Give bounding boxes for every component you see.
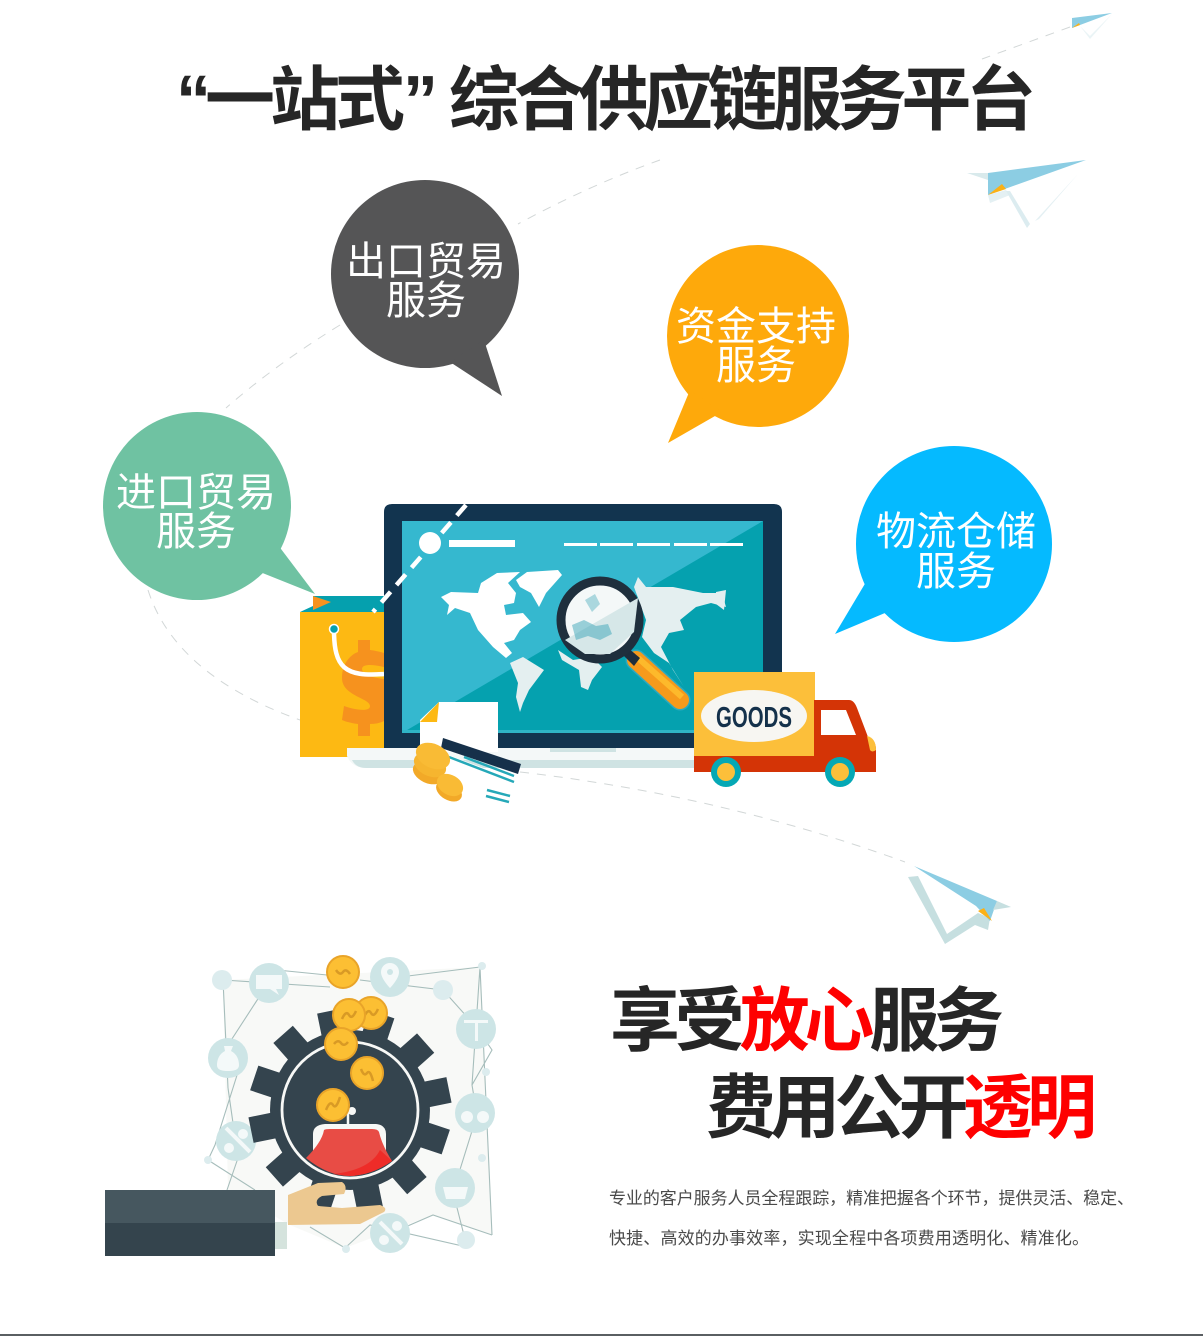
background sheet (223, 967, 492, 1248)
speech bubble: logistics and warehousing: 物流仓储 (876, 510, 1036, 554)
speech bubble: logistics and warehousing (835, 446, 1052, 642)
description text (609, 1189, 1134, 1248)
truck cab (694, 700, 876, 772)
paper plane: top small (1072, 13, 1112, 39)
gear (248, 1008, 452, 1212)
heading: transparent costs: 费用公开透明 (706, 1069, 1097, 1147)
speech bubble: import trade: 进口贸易 (116, 471, 276, 515)
wheels (711, 757, 741, 787)
world map (441, 570, 726, 712)
speech bubble: export trade: 服务 (386, 279, 466, 323)
title: 一站式 (205, 61, 405, 139)
percent icon (226, 1128, 250, 1152)
signpost icon (464, 1020, 488, 1041)
falling coins (317, 956, 387, 1121)
document, coins and bank card (409, 702, 521, 806)
speech bubble: import trade: 服务 (156, 510, 236, 554)
description text: 快捷、高效的办事效率，实现全程中各项费用透明化、精准化。 (609, 1229, 1089, 1248)
location pin icon (381, 963, 399, 988)
dashed route (373, 505, 466, 612)
title: ” (403, 61, 438, 139)
description text: 专业的客户服务人员全程跟踪，精准把握各个环节，提供灵活、稳定、 (609, 1189, 1134, 1208)
shopping bag (300, 596, 385, 757)
flight path dashed lines (148, 27, 1070, 862)
speech bubble: import trade (103, 412, 315, 600)
title: “ (176, 61, 211, 139)
icon circles (204, 957, 496, 1253)
percent icon (380, 1222, 402, 1244)
laptop bezel (384, 504, 782, 748)
wallet (306, 1107, 392, 1176)
speech bubble: financing: 资金支持 (676, 305, 836, 349)
laptop base (347, 748, 720, 768)
delivery truck: GOODS (716, 702, 792, 734)
speech bubble: export trade (331, 180, 519, 396)
paper plane: upper right (967, 160, 1086, 228)
truck cargo box (694, 672, 815, 756)
laptop with world map (347, 504, 782, 768)
delivery truck (694, 672, 876, 787)
title: 综合供应链服务平台 (449, 61, 1036, 139)
heading: worry-free service: 享受放心服务 (610, 982, 1004, 1060)
speech bubble: logistics and warehousing: 服务 (916, 550, 996, 594)
paper plane: lower right (908, 866, 1011, 944)
basket icon (443, 1187, 468, 1199)
menu bars (449, 540, 743, 547)
speech bubble: financing (667, 245, 849, 443)
laptop screen (402, 521, 763, 733)
binoculars icon (461, 1111, 473, 1123)
sleeve (105, 1190, 287, 1256)
hand (288, 1182, 385, 1225)
speech bubble: export trade: 出口贸易 (346, 240, 506, 284)
money bag icon (217, 1046, 239, 1071)
magnifying glass (561, 581, 682, 700)
title (176, 61, 1036, 139)
speech bubble: financing: 服务 (716, 344, 796, 388)
chat icon (256, 975, 282, 995)
gear and wallet illustration (105, 956, 496, 1256)
network lines (208, 967, 492, 1248)
